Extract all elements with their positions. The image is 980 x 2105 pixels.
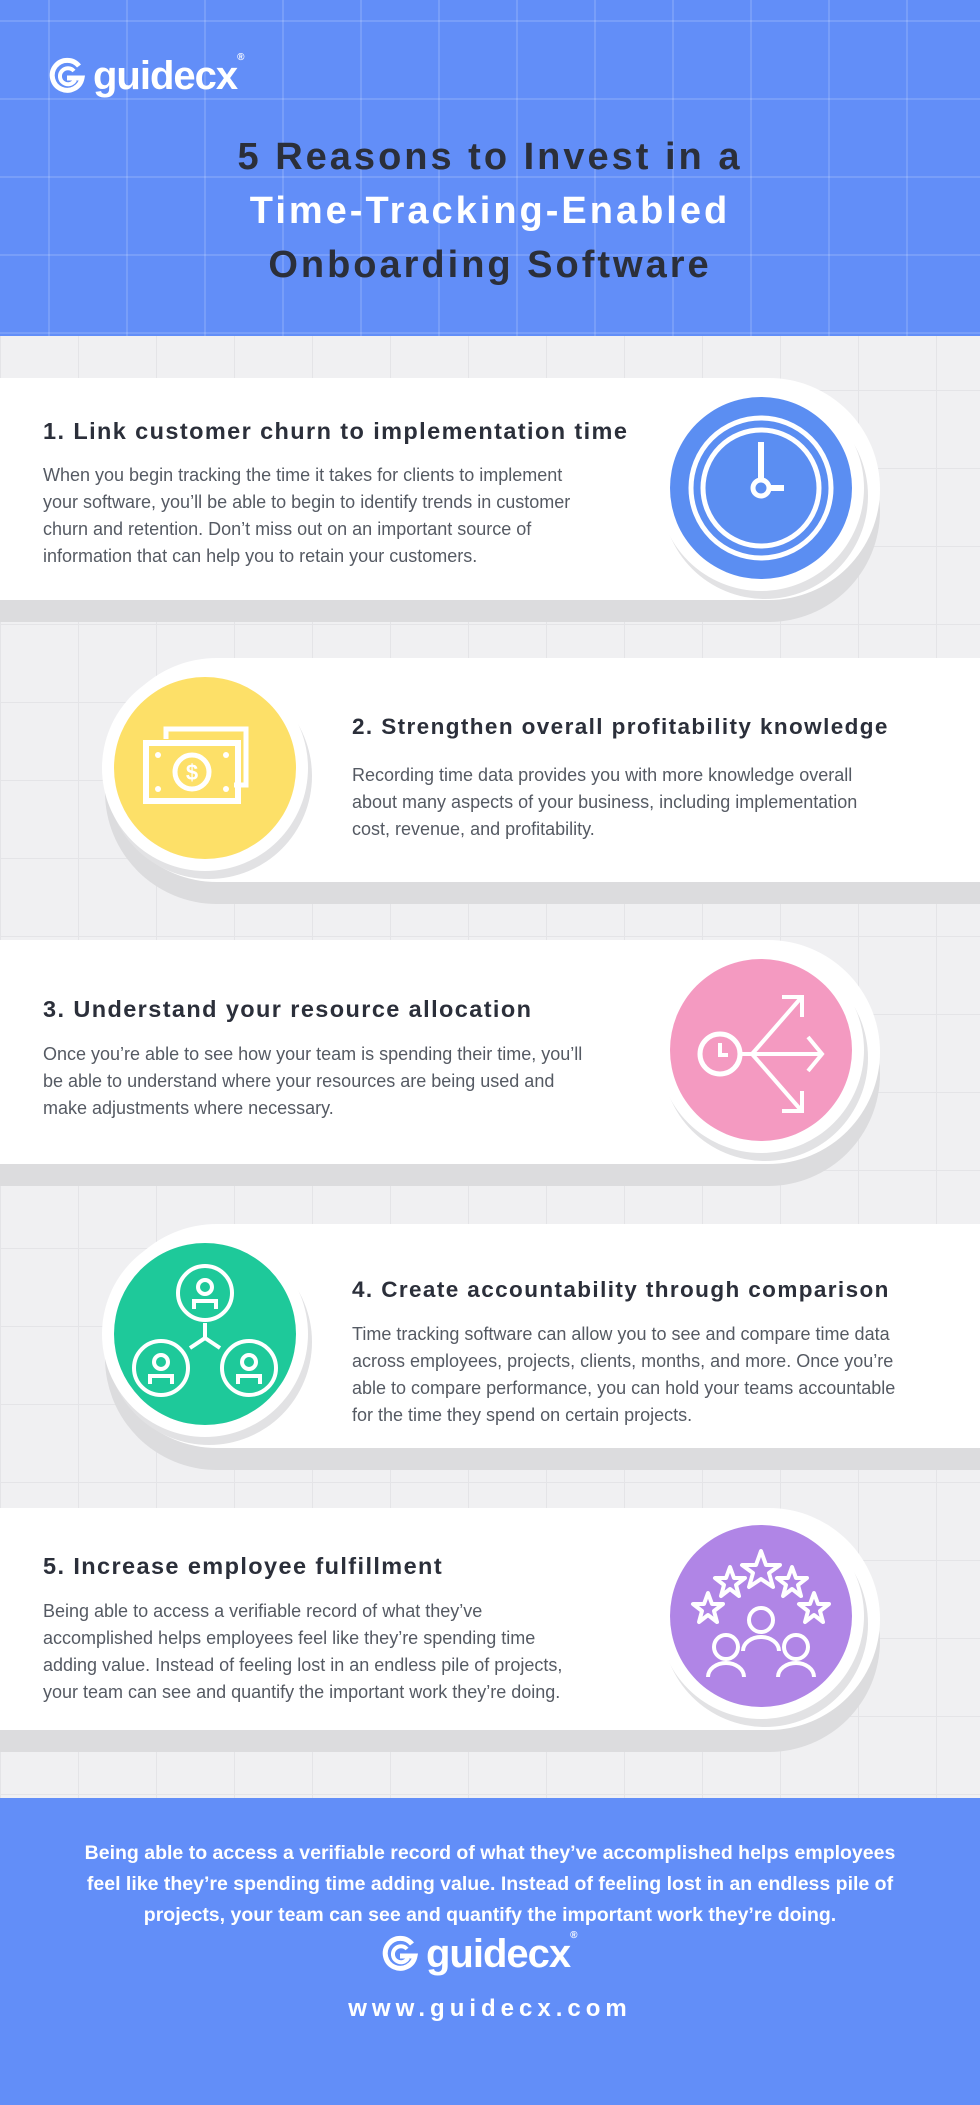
footer text: Being able to access a verifiable record of what they’ve accomplished helps employees: [85, 1842, 895, 1864]
logo bottom: ®: [570, 1930, 578, 1941]
footer text: [85, 1842, 895, 1926]
text 1: your software, you’ll be able to begin to identify trends in customer: [43, 492, 570, 512]
text 4: for the time they spend on certain projects.: [352, 1405, 692, 1425]
panel: reason 2: [102, 658, 980, 904]
text 2: [352, 765, 857, 839]
title: Onboarding Software: [268, 244, 712, 286]
logo top: ®: [237, 52, 245, 63]
footer text: projects, your team can see and quantify the important work they’re doing.: [144, 1904, 836, 1926]
logo bottom: guidecx: [426, 1932, 570, 1976]
text 2: about many aspects of your business, including implementation: [352, 792, 857, 812]
text 5: [43, 1601, 562, 1702]
header banner: [0, 0, 980, 336]
text 5: accomplished helps employees feel like they’re spending time: [43, 1628, 535, 1648]
heading 1: 1. Link customer churn to implementation time: [43, 418, 628, 444]
text 3: [43, 1044, 582, 1118]
text 4: able to compare performance, you can hold your teams accountable: [352, 1378, 895, 1398]
icon: team network: [102, 1231, 308, 1437]
title: 5 Reasons to Invest in a: [238, 136, 742, 178]
footer text: feel like they’re spending time adding value. Instead of feeling lost in an endless pile of: [87, 1873, 893, 1895]
logo top: guidecx: [93, 54, 237, 98]
text 3: Once you’re able to see how your team is spending their time, you’ll: [43, 1044, 582, 1064]
title: Time-Tracking-Enabled: [250, 190, 730, 232]
text 2: Recording time data provides you with more knowledge overall: [352, 765, 852, 785]
text 1: information that can help you to retain your customers.: [43, 546, 477, 566]
icon: clock: [658, 385, 864, 591]
icon: money: [102, 665, 308, 871]
heading 3: 3. Understand your resource allocation: [43, 996, 532, 1022]
text 5: Being able to access a verifiable record of what they’ve: [43, 1601, 482, 1621]
panel: reason 4: [102, 1224, 980, 1470]
text 3: be able to understand where your resources are being used and: [43, 1071, 554, 1091]
panel: reason 1: [0, 378, 880, 622]
text 2: cost, revenue, and profitability.: [352, 819, 595, 839]
footer banner: [0, 1798, 980, 2105]
title: [238, 136, 742, 286]
text 1: churn and retention. Don’t miss out on an important source of: [43, 519, 531, 539]
heading 4: 4. Create accountability through comparison: [352, 1277, 890, 1302]
text 5: your team can see and quantify the important work they’re doing.: [43, 1682, 560, 1702]
text 5: adding value. Instead of feeling lost in an endless pile of projects,: [43, 1655, 562, 1675]
icon: money: $: [186, 760, 198, 785]
text 4: across employees, projects, clients, months, and more. Once you’re: [352, 1351, 893, 1371]
text 1: [43, 465, 570, 566]
icon: allocation arrows: [658, 947, 864, 1153]
icon: stars and people: [658, 1513, 864, 1719]
panel: reason 3: [0, 940, 880, 1186]
heading 5: 5. Increase employee fulfillment: [43, 1553, 443, 1579]
text 3: make adjustments where necessary.: [43, 1098, 334, 1118]
text 4: [352, 1324, 895, 1425]
panel: reason 5: [0, 1508, 880, 1752]
heading 2: 2. Strengthen overall profitability knowledge: [352, 714, 889, 739]
text 1: When you begin tracking the time it takes for clients to implement: [43, 465, 562, 485]
website url: www.guidecx.com: [348, 1995, 632, 2022]
text 4: Time tracking software can allow you to see and compare time data: [352, 1324, 890, 1344]
